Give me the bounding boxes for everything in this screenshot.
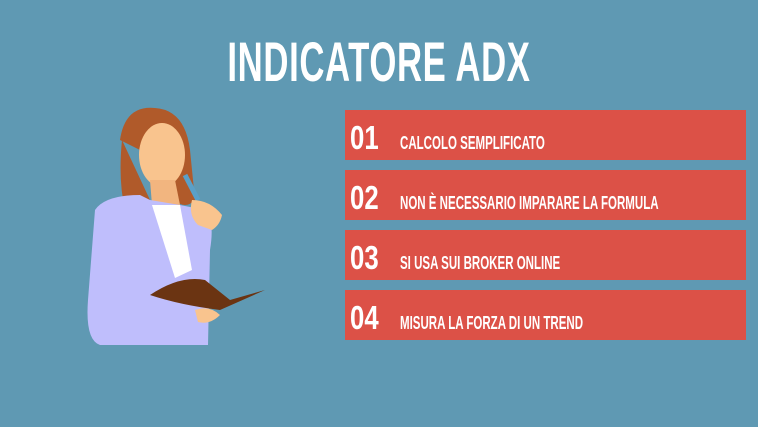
item 01 [345, 110, 746, 160]
item 04: 04 [350, 299, 379, 336]
item 01: CALCOLO SEMPLIFICATO [400, 133, 545, 153]
item 03: 03 [350, 239, 379, 276]
item 02 [345, 170, 746, 220]
item 01: 01 [350, 119, 379, 156]
item 03: SI USA SUI BROKER ONLINE [400, 253, 560, 273]
item 04 [345, 290, 746, 340]
item 02: NON È NECESSARIO IMPARARE LA FORMULA [400, 193, 659, 213]
item 04: MISURA LA FORZA DI UN TREND [400, 313, 583, 333]
item 02: 02 [350, 179, 379, 216]
item 03 [345, 230, 746, 280]
title: INDICATORE ADX [227, 30, 531, 93]
illustration: woman with notebook [88, 108, 265, 345]
